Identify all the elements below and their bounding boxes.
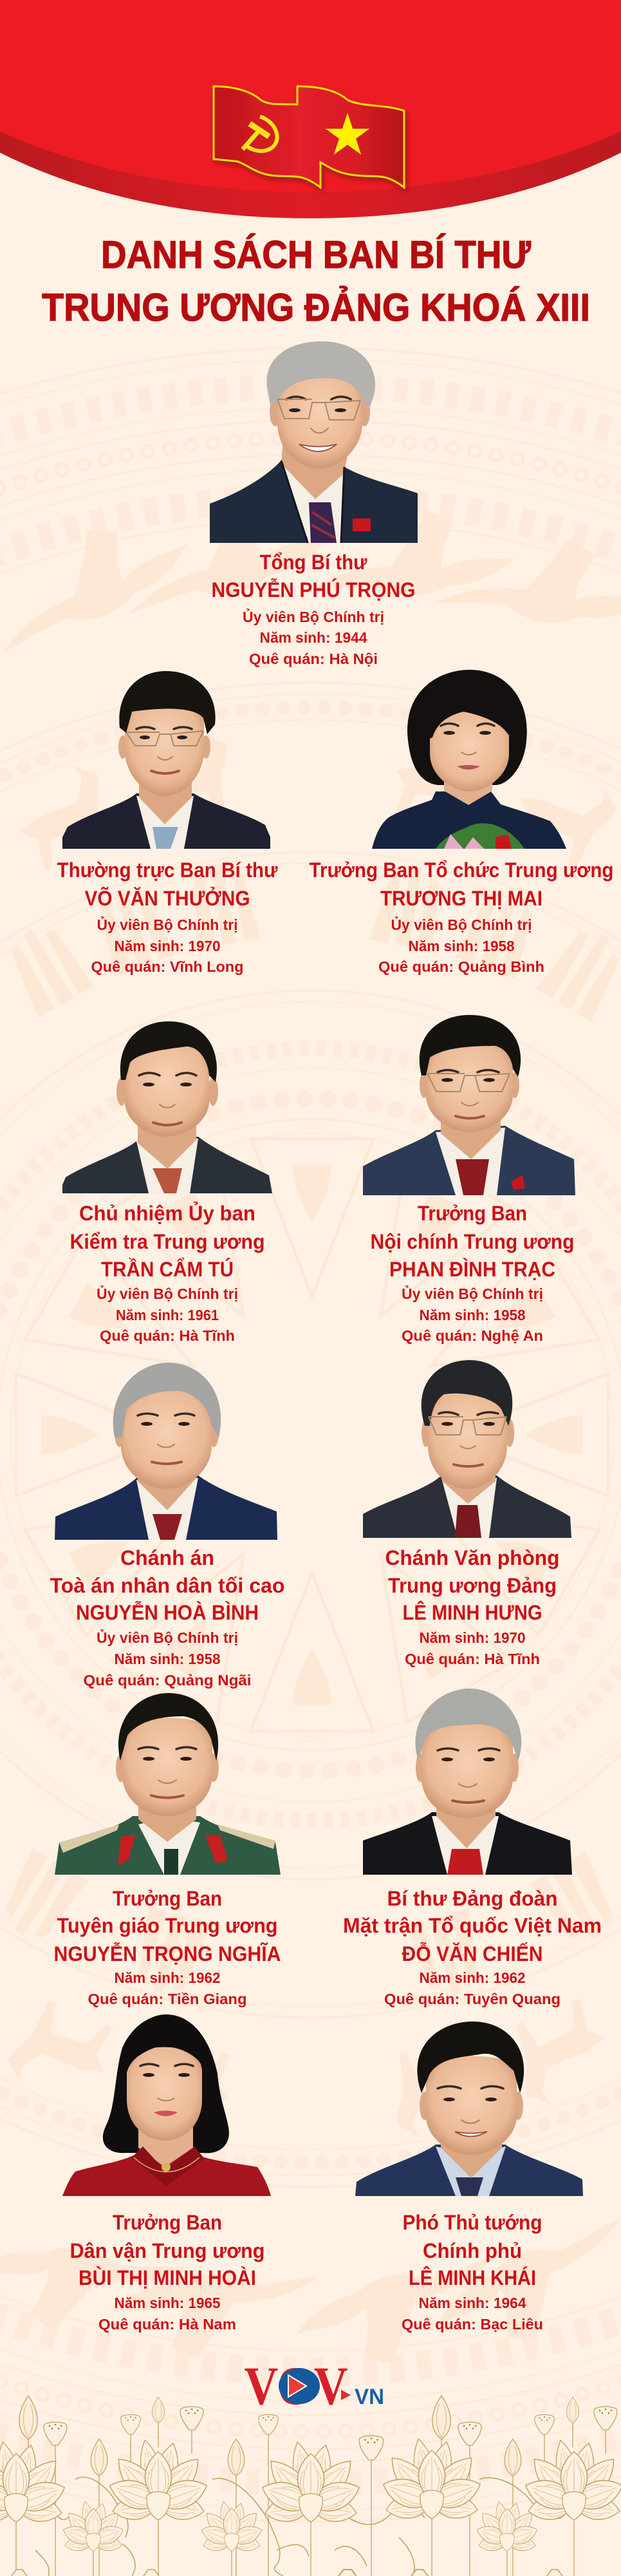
panel: Trần Cẩm Tú: Kiểm tra Trung ương [70, 1230, 265, 1253]
panel: Đỗ Văn Chiến: Mặt trận Tổ quốc Việt Nam [343, 1914, 602, 1937]
panel: Lê Minh Hưng: LÊ MINH HƯNG [403, 1601, 542, 1624]
panel: Nguyễn Trọng Nghĩa [54, 1693, 281, 2007]
role and name: Thường trực Ban Bí thư [57, 858, 278, 882]
biography: Ủy viên Bộ Chính trị [97, 1284, 238, 1302]
title [42, 233, 590, 329]
biography: Quê quán: Tuyên Quang [384, 1991, 561, 2007]
role and name: Tổng Bí thư [260, 551, 367, 574]
panel: Võ Văn Thưởng [57, 671, 278, 975]
logo: VOV.VN: VOV [245, 2356, 348, 2416]
panel: Đỗ Văn Chiến [343, 1689, 602, 2007]
biography: Năm sinh: 1964 [418, 2295, 526, 2311]
biography [243, 607, 384, 667]
icon: hammer and sickle [243, 117, 277, 151]
portrait: Nguyễn Hoà Bình [55, 1363, 277, 1540]
biography: Quê quán: Nghệ An [402, 1327, 543, 1344]
biography [378, 915, 544, 975]
biography: Quê quán: Hà Tĩnh [405, 1651, 540, 1667]
biography: Năm sinh: 1970 [115, 938, 220, 954]
title: TRUNG ƯƠNG ĐẢNG KHOÁ XIII [42, 286, 590, 329]
biography: Năm sinh: 1944 [260, 629, 367, 646]
biography: Ủy viên Bộ Chính trị [402, 1284, 543, 1302]
lotus border decoration [0, 2396, 621, 2576]
panel: Trương Thị Mai [309, 670, 614, 975]
biography: Quê quán: Hà Nam [98, 2316, 236, 2333]
panel: Nguyễn Phú Trọng: NGUYỄN PHÚ TRỌNG [211, 578, 416, 601]
red header arc [0, 0, 621, 218]
panel: Trần Cẩm Tú: TRẦN CẨM TÚ [101, 1258, 234, 1281]
biography: Năm sinh: 1965 [115, 2295, 221, 2311]
panel: Lê Minh Khái: Chính phủ [423, 2239, 522, 2262]
role and name: Chủ nhiệm Ủy ban [79, 1202, 255, 1225]
panel: Nguyễn Hoà Bình [50, 1363, 284, 1689]
biography [88, 1969, 247, 2007]
biography: Năm sinh: 1962 [115, 1969, 220, 1986]
panel: Bùi Thị Minh Hoài: BÙI THỊ MINH HOÀI [79, 2266, 256, 2289]
panel: Lê Minh Khái: LÊ MINH KHÁI [409, 2266, 536, 2289]
panel: Bùi Thị Minh Hoài [62, 2014, 271, 2333]
biography: Quê quán: Hà Nội [249, 650, 378, 667]
biography: Năm sinh: 1958 [408, 938, 515, 954]
biography [402, 1284, 543, 1344]
panel: Lê Minh Hưng: Trung ương Đảng [388, 1574, 557, 1597]
biography [98, 2295, 236, 2333]
biography: Quê quán: Bạc Liêu [402, 2316, 543, 2333]
biography: Năm sinh: 1958 [115, 1651, 221, 1667]
role and name: Bí thư Đảng đoàn [387, 1887, 557, 1910]
portrait: Phan Đình Trạc [363, 1015, 575, 1195]
biography: Năm sinh: 1958 [420, 1307, 526, 1323]
role and name: Chánh án [120, 1546, 214, 1569]
biography: Ủy viên Bộ Chính trị [97, 1628, 238, 1646]
biography: Ủy viên Bộ Chính trị [391, 915, 532, 933]
panel: Phan Đình Trạc [363, 1015, 575, 1344]
panel: Nguyễn Trọng Nghĩa: Tuyên giáo Trung ương [57, 1914, 278, 1937]
biography [402, 2295, 543, 2333]
portrait: Lê Minh Khái [355, 2022, 583, 2196]
biography: Quê quán: Vĩnh Long [91, 958, 243, 975]
panel: Trương Thị Mai: TRƯƠNG THỊ MAI [380, 887, 542, 910]
panel: Nguyễn Hoà Bình: NGUYỄN HOÀ BÌNH [76, 1601, 259, 1624]
biography [84, 1628, 251, 1689]
panel: Đỗ Văn Chiến: ĐỖ VĂN CHIẾN [402, 1942, 543, 1965]
role and name: Chánh Văn phòng [385, 1546, 560, 1569]
panel: Phan Đình Trạc: PHAN ĐÌNH TRẠC [389, 1258, 555, 1281]
panel: Nguyễn Trọng Nghĩa: NGUYỄN TRỌNG NGHĨA [54, 1942, 281, 1965]
panel: Võ Văn Thưởng: VÕ VĂN THƯỞNG [85, 887, 250, 910]
role and name: Trưởng Ban [113, 2211, 222, 2234]
portrait: Nguyễn Phú Trọng [210, 341, 418, 543]
biography: Năm sinh: 1970 [420, 1629, 525, 1646]
role and name: Phó Thủ tướng [403, 2211, 542, 2234]
panel: Nguyễn Phú Trọng [210, 341, 418, 667]
portrait: Nguyễn Trọng Nghĩa [55, 1693, 281, 1875]
logo: VOV.VN: VN [355, 2385, 384, 2409]
portrait: Đỗ Văn Chiến [363, 1689, 572, 1875]
biography: Quê quán: Quảng Ngãi [84, 1672, 251, 1689]
portrait: Lê Minh Hưng [363, 1360, 571, 1538]
biography [405, 1629, 540, 1667]
panel: Bùi Thị Minh Hoài: Dân vận Trung ương [70, 2239, 265, 2262]
panel: Trần Cẩm Tú [62, 1021, 272, 1344]
biography: Ủy viên Bộ Chính trị [243, 607, 384, 625]
panel: Nguyễn Hoà Bình: Toà án nhân dân tối cao [50, 1574, 284, 1597]
biography: Quê quán: Quảng Bình [378, 958, 544, 975]
role and name: Trưởng Ban [418, 1202, 527, 1225]
biography: Quê quán: Hà Tĩnh [100, 1327, 235, 1344]
portrait: Trần Cẩm Tú [62, 1021, 272, 1193]
role and name: Trưởng Ban [113, 1887, 222, 1910]
portrait: Bùi Thị Minh Hoài [62, 2014, 271, 2196]
biography [91, 915, 243, 975]
portrait: Võ Văn Thưởng [62, 671, 270, 849]
panel: Lê Minh Khái [355, 2022, 583, 2333]
biography [97, 1284, 238, 1344]
biography: Năm sinh: 1962 [420, 1969, 525, 1986]
biography: Năm sinh: 1961 [116, 1307, 219, 1323]
biography [384, 1969, 561, 2007]
panel: Phan Đình Trạc: Nội chính Trung ương [371, 1230, 574, 1253]
panel: Lê Minh Hưng [363, 1360, 571, 1667]
icon: yellow star [326, 113, 369, 155]
biography: Ủy viên Bộ Chính trị [97, 915, 238, 933]
icon: blue play circle [279, 2368, 320, 2404]
title: DANH SÁCH BAN BÍ THƯ [101, 233, 531, 276]
portrait: Trương Thị Mai [372, 670, 566, 849]
biography: Quê quán: Tiền Giang [88, 1991, 247, 2007]
icon: party and national flag [214, 86, 404, 187]
